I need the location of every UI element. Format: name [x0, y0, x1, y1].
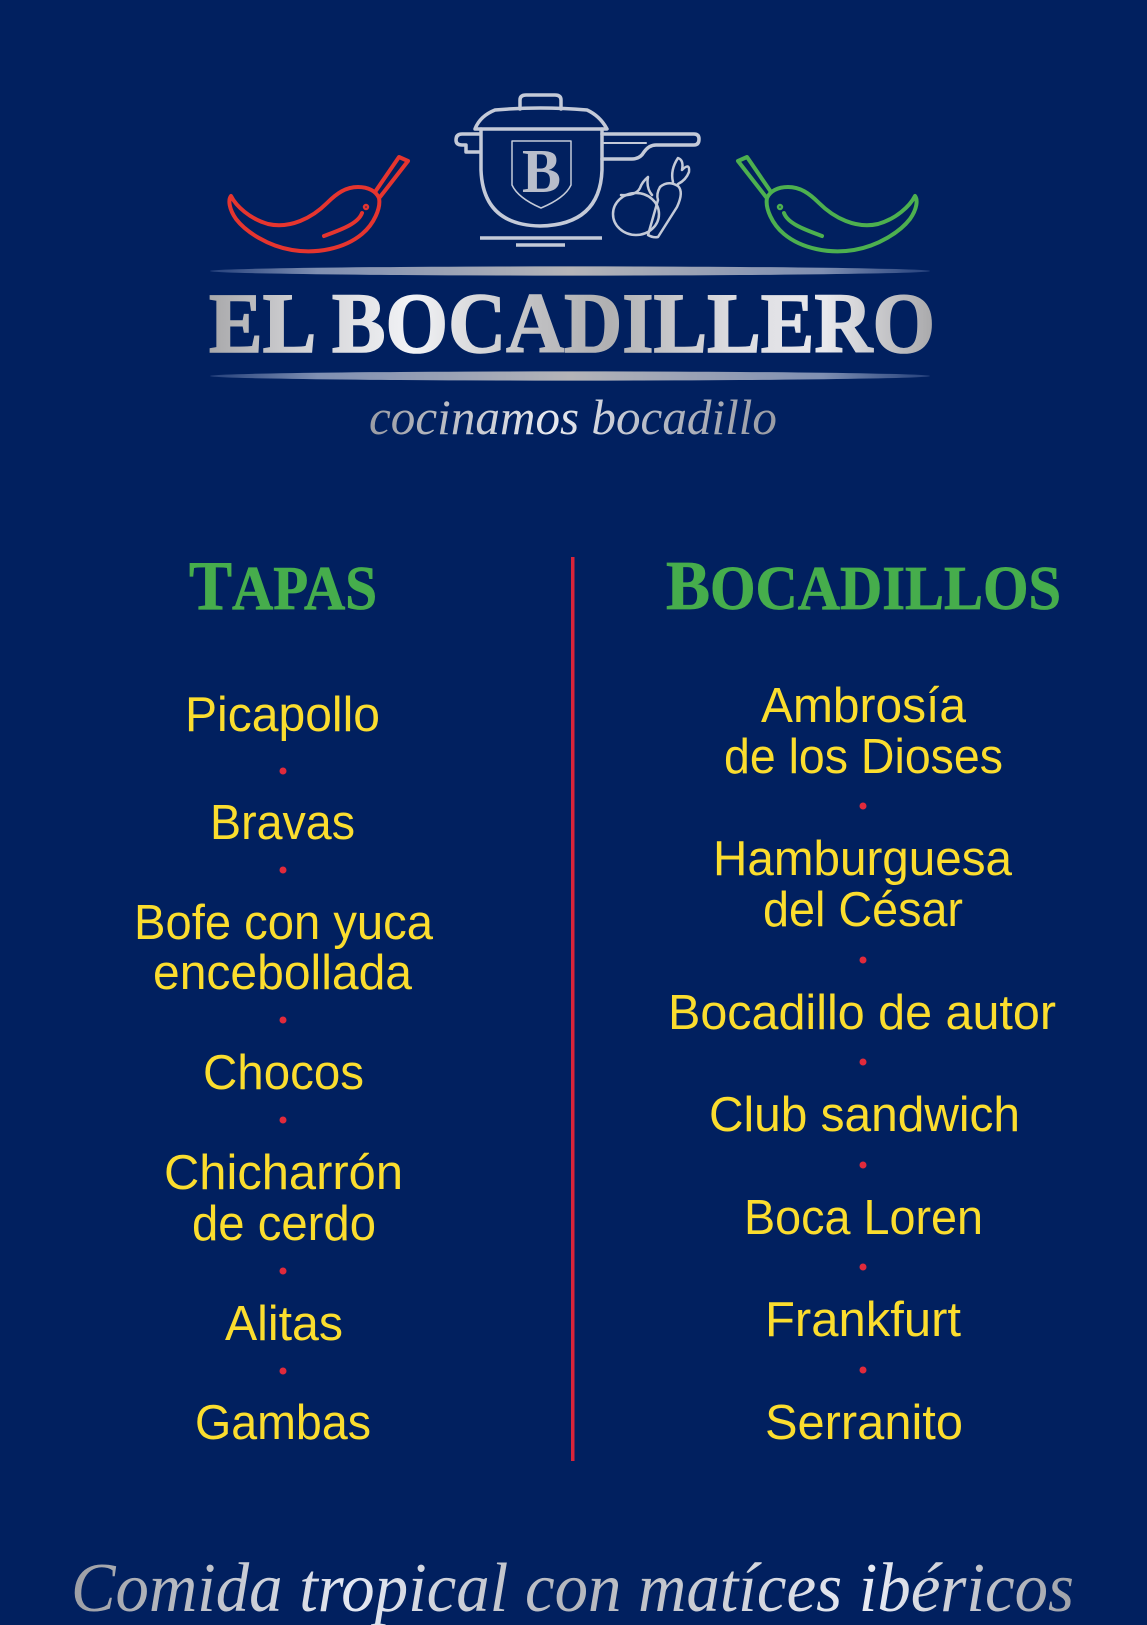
- icon: red chili pepper: [229, 157, 408, 251]
- list: tapas: Alitas: [225, 1297, 343, 1351]
- icon: cooking pot logo: [456, 95, 699, 245]
- top silver bar: [210, 266, 930, 276]
- bottom silver bar: [210, 371, 930, 381]
- list: bocadillos: Club sandwich: [709, 1088, 1020, 1142]
- list: bocadillos: Ambrosía: [761, 679, 967, 733]
- icon: cooking pot logo: B: [522, 138, 561, 206]
- list: tapas: de cerdo: [192, 1197, 376, 1251]
- list: tapas: [134, 688, 434, 1450]
- list: bocadillos: de los Dioses: [724, 730, 1003, 784]
- title: EL BOCADILLERO: [209, 275, 935, 371]
- list: bocadillos: Hamburguesa: [713, 832, 1013, 886]
- list: tapas: Chocos: [203, 1046, 364, 1100]
- list: tapas: encebollada: [153, 946, 413, 1000]
- list: bocadillos: Bocadillo de autor: [668, 986, 1056, 1040]
- list: bocadillos: Boca Loren: [744, 1191, 983, 1245]
- list: bocadillos: Frankfurt: [765, 1293, 961, 1347]
- list: tapas: Picapollo: [185, 688, 380, 742]
- list: bocadillos: [668, 679, 1056, 1450]
- list: tapas: Bofe con yuca: [134, 896, 434, 950]
- list: tapas: Chicharrón: [164, 1146, 403, 1200]
- heading: Bocadillos: BOCADILLOS: [666, 548, 1061, 625]
- tagline: Comida tropical con matíces ibéricos: [71, 1550, 1074, 1625]
- subtitle: cocinamos bocadillo: [369, 389, 777, 445]
- list: tapas: Gambas: [195, 1396, 371, 1450]
- list: bocadillos: Serranito: [765, 1396, 963, 1450]
- list: bocadillos: del César: [763, 883, 963, 937]
- heading: Tapas: TAPAS: [189, 548, 377, 625]
- icon: green chili pepper: [738, 157, 917, 251]
- column divider: [571, 557, 574, 1461]
- list: tapas: Bravas: [210, 796, 355, 850]
